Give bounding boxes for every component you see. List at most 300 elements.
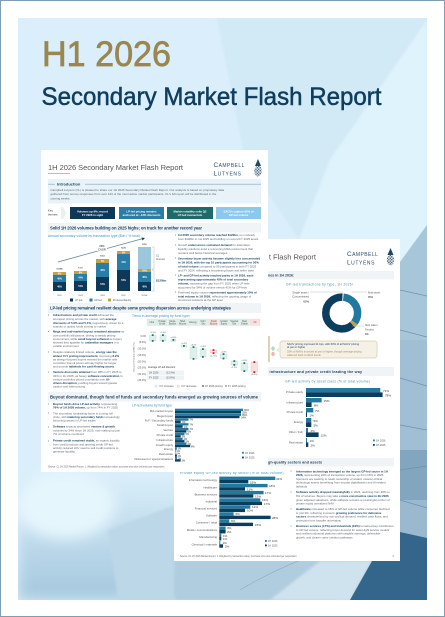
- stacked bar chart: annual secondary volume: [48, 234, 167, 302]
- bar chart: LP-led volume by fund type: Private credit: [157, 433, 173, 437]
- change labels: (1.7%): [211, 356, 217, 358]
- pricing commentary bullets: volatile environment: [53, 344, 79, 348]
- bar chart: LP-led volume by fund type: Mega buyout: [157, 414, 173, 418]
- bar chart: GP-led activity by sector: 28%: [272, 516, 278, 520]
- y axis: [132, 335, 147, 382]
- fund type header row: Equity: [221, 323, 228, 326]
- sector commentary bullets: tailwinds: [296, 484, 308, 488]
- bar values: 46%: [57, 286, 62, 288]
- fund type header row: M&A: [180, 320, 186, 323]
- bar chart: GP-led activity by asset class: Energy: [294, 420, 304, 424]
- donut chart: GP-led transactions by type: Single asset /: [292, 290, 309, 294]
- bar chart: LP-led volume by fund type: 0%: [176, 450, 181, 453]
- average discount table: FY 2025: [149, 377, 159, 380]
- bar chart: LP-led volume by fund type: 1%: [178, 455, 182, 458]
- buyout commentary bullets: Software impacts decreased venture & growth: [53, 425, 115, 429]
- bar values: $226: [121, 248, 127, 250]
- bar values: 45%: [57, 278, 62, 280]
- volume commentary bullets: total volume in 1H 2026, reflecting the growing usage of: [178, 294, 251, 298]
- bar chart: GP-led activity by sector: Industrial: [206, 500, 217, 504]
- year labels: 2026E: [141, 295, 148, 297]
- volume commentary bullets: from $108bn in 1H 2025 and building on record FY 2025 levels: [178, 237, 259, 241]
- bar values: 10%: [142, 270, 147, 272]
- pricing legend: [155, 385, 246, 388]
- bar chart: GP-led activity by sector: 16%: [250, 480, 256, 484]
- buyout commentary bullets: circle, with maturing secondary funds increasingly: [53, 415, 120, 419]
- average discount table: (13.3%): [166, 372, 175, 375]
- fund type header row: Real: [242, 321, 247, 323]
- bar chart: GP-led activity by sector: 17%: [265, 491, 271, 495]
- bar chart: GP-led activity by sector: Software: [206, 514, 217, 518]
- section header: high-quality sectors: [268, 458, 394, 466]
- page 2 source footnote: 2: [392, 556, 394, 558]
- bar chart: LP-led volume by fund type: 5%: [186, 440, 190, 444]
- bar chart: GP-led activity by sector: 1%: [223, 534, 228, 538]
- theme: SACVs: [216, 207, 261, 219]
- bar chart: GP-led activity by sector: Healthcare: [203, 485, 217, 489]
- bar chart: GP-led activity by asset class: 2%: [310, 429, 315, 433]
- bar chart: GP-led activity by sector: Private equity GP-led activity by sector (% of total volume): [180, 471, 284, 475]
- forecast bracket: CL: [156, 254, 160, 258]
- pricing legend: 1H 2026 pricing: [205, 385, 223, 388]
- key themes row: [48, 207, 261, 219]
- sector commentary bullets: to GP-led volume, reflecting buyer demand for asset-light service models: [296, 528, 390, 532]
- bar chart: LP-led volume by fund type: 1%: [178, 457, 182, 460]
- volume commentary bullets: remains well below historical averages: [178, 251, 228, 255]
- sector commentary bullets: private equity unrealized NAV: [296, 502, 334, 506]
- donut chart: GP-led transactions by type: 35%: [368, 296, 374, 299]
- pricing commentary bullets: conviction that oil prices will stay higher for longer: [53, 361, 117, 365]
- y axis: (10.0%): [138, 347, 146, 350]
- bar chart: GP-led activity by sector: [180, 471, 284, 548]
- bar chart: GP-led activity by asset class: Other / FoF: [289, 430, 303, 434]
- fund type header row: Estate: [241, 323, 248, 326]
- bar chart: LP-led volume by fund type: Mid-market buyout: [150, 409, 173, 413]
- buyout commentary bullets: from credit products and growing credit GP-led: [53, 442, 113, 446]
- change labels: +2.0%: [160, 332, 166, 334]
- change labels: +0.5%: [181, 343, 187, 345]
- bar chart: GP-led activity by sector: Financial services: [195, 507, 218, 511]
- change labels: +3.3%: [200, 346, 206, 348]
- fund type header row: Mega: [170, 321, 176, 323]
- bar chart: GP-led activity by asset class: Real estate: [289, 440, 303, 444]
- sector commentary bullets: given adjusted valuations, while software remains a meaningful portion of: [296, 498, 390, 502]
- bar chart: GP-led activity by asset class: 12%: [320, 434, 327, 438]
- theme: volumes: [70, 207, 115, 219]
- title: H1 2026: H1 2026: [42, 35, 171, 74]
- change labels: +0.8%: [170, 337, 177, 339]
- pricing legend: YoY increase: [159, 385, 174, 388]
- bar chart: LP-led volume by fund type: 36%: [244, 409, 250, 412]
- bar chart: LP-led volume by fund type: 8%: [191, 445, 195, 448]
- pricing legend: FY 2025 pricing: [228, 385, 246, 388]
- pricing commentary bullets: Mega and mid-market buyout remained attractive as: [53, 330, 125, 334]
- donut chart: GP-led transactions by type: Multi asset: [368, 292, 380, 294]
- change labels: [150, 332, 258, 376]
- bar chart: GP-led activity by asset class: 15%: [324, 399, 330, 403]
- y axis: (5.0%): [139, 341, 146, 344]
- floating bars: [150, 335, 248, 371]
- chart legend: [70, 298, 132, 302]
- section header: GP-led transactions: [268, 271, 394, 280]
- bar chart: GP-led activity by sector: 16%: [262, 498, 268, 502]
- pricing commentary bullets: strongest pricing across the market, with average: [53, 317, 117, 321]
- bar chart: GP-led activity by sector: 6%: [231, 519, 236, 523]
- volume commentary bullets: 1H 2026 secondary volume reached $120bn, up modestly: [178, 233, 256, 237]
- sector commentary bullets: Information technology emerged as the largest GP-led sector in 1H: [296, 469, 388, 473]
- bar chart: GP-led activity by sector: 10%: [247, 509, 253, 513]
- bar chart: GP-led activity by sector: 1%: [222, 541, 227, 545]
- floating bar chart: trend in average pricing by fund type: [132, 314, 260, 388]
- introduction panel: coming weeks.: [50, 196, 71, 200]
- theme: SACVs: SACVs capture 62% of: [224, 209, 254, 213]
- y axis: 0.0%: [141, 335, 147, 338]
- change labels: +1.9%: [150, 332, 156, 334]
- volume commentary bullets: structured solutions at the GP level: [178, 298, 223, 302]
- donut chart: GP-led transactions by type: 3%: [365, 333, 369, 336]
- callout: SACV and MAV pricing: 33% of MAVs in priced at par or higher, though average pricing: [287, 349, 362, 353]
- change labels: +8.2%: [191, 344, 197, 346]
- theme: market volatility: LP-led momentum: [178, 213, 203, 217]
- bar values: 41%: [78, 276, 83, 280]
- buyout commentary bullets: activity reduced LPs' need to sell credit positions to: [53, 446, 119, 450]
- volume commentary bullets: Preferred equity volume represented approximately 10% of: [178, 290, 257, 294]
- buyout commentary bullets: becoming assets in LP-led trades: [53, 419, 96, 423]
- bar chart: LP-led volume by fund type: 7%: [190, 428, 194, 431]
- bar chart: LP-led volume by fund type: 1H 2026: [245, 452, 255, 455]
- sector commentary bullets: sectors characterized by non-cyclical demand, resilient cash flows, and: [296, 515, 388, 519]
- theme: SACVs: GP-led volume: [229, 213, 249, 217]
- forecast bracket: forecast: [156, 258, 165, 261]
- pricing commentary bullets: discounts of 5.0% and 5.1%, respectively, driven by a: [53, 321, 124, 325]
- sector commentary bullets: Business services (17%) and industrials (16%) remained key contributors: [296, 524, 394, 528]
- section header: solid volumes: [48, 223, 261, 232]
- bar chart: LP-led volume by fund type: 1%: [178, 448, 182, 451]
- fund type header row: Energy: [189, 321, 197, 324]
- section header: buyout dominated: [48, 392, 261, 402]
- bar chart: LP-led volume by fund type: 35%: [242, 412, 248, 414]
- volume commentary bullets: of total volume compared to 55 participants in both FY 2025: [178, 264, 257, 268]
- chart legend: GP-led: [94, 299, 102, 302]
- average discount table: (13.9%): [166, 377, 175, 380]
- bar chart: GP-led activity by sector: 6%: [236, 512, 240, 516]
- bar values: 41%: [121, 261, 126, 264]
- page 2 logo: CAMPBELL: [347, 251, 378, 258]
- page 2 source footnote: [180, 555, 394, 558]
- fund type header row: Buyout: [169, 323, 176, 326]
- section header: GP-led transactions: nes in 1H 2026:: [268, 274, 294, 278]
- fund type header row: Special: [230, 321, 238, 323]
- bar chart: GP-led activity by sector: Consumer / retail: [196, 521, 217, 525]
- sector commentary bullets: technology assets benefitting from secular digitalization and AI-related: [296, 481, 386, 485]
- bar values: $108B: [56, 268, 63, 270]
- sector commentary bullets: Sponsors are seeking to retain ownership of scaled, mission-critical: [296, 477, 382, 481]
- bar chart: GP-led activity by asset class: 71%: [383, 389, 389, 393]
- bar values: 42%: [100, 269, 105, 272]
- bar chart: LP-led volume by fund type: 7%: [190, 418, 194, 422]
- pricing commentary bullets: 32% in 1H 2026, as heavy software concentration in: [53, 374, 123, 378]
- bar values: $162: [100, 256, 106, 258]
- bar chart: LP-led volume by fund type: 6%: [188, 431, 192, 434]
- report page 2 (behind): [174, 239, 400, 561]
- pricing commentary bullets: Venture discounts widened from 28% in FY 2025 to: [53, 370, 122, 374]
- fund type header row: Private: [159, 320, 166, 323]
- bar values: 45%: [142, 286, 147, 288]
- page 1 logo: [214, 159, 262, 178]
- page 1 logo: CAMPBELL: [214, 162, 245, 169]
- buyout commentary bullets: The secondary fundraising boom is coming full: [53, 411, 113, 415]
- bar chart: GP-led activity by sector: 2%: [225, 544, 230, 548]
- pricing commentary bullets: environment, while small buyout softened as buyers: [53, 337, 122, 341]
- year labels: 2025: [121, 295, 127, 297]
- theme: market volatility: Market volatility sofie Q2: [174, 209, 207, 213]
- fund type header row: Sec: [201, 324, 206, 326]
- page 1 source footnote: Source: CL 1H 2026 Market Report. 1. Weighted by transaction value; purchase price plus unfunded per respondent.: [48, 466, 165, 469]
- bar chart: GP-led activity by asset class: GP-led activity by asset class (% of total volume): [285, 380, 370, 384]
- bar chart: LP-led volume by fund type: 35%: [242, 414, 248, 417]
- page 2 logo: LUTYENS: [347, 260, 375, 266]
- fund type header row: VC: [253, 322, 257, 324]
- buyout commentary bullets: 76% of 1H 2026 volume, up from 74% in FY 2025: [53, 405, 118, 409]
- y axis: (35.0%): [138, 379, 146, 382]
- introduction panel: [48, 179, 261, 204]
- bar chart: LP-led volume by fund type: 0%: [176, 452, 181, 456]
- pricing commentary bullets: widest YoY pricing improvement, improving 8.2%: [52, 354, 119, 358]
- bar chart: GP-led activity by sector: 15%: [255, 523, 261, 527]
- page 1 logo: LUTYENS: [214, 170, 242, 178]
- chart legend: Preferred Equity: [113, 299, 132, 302]
- bar chart: GP-led activity by sector: 17%: [264, 502, 270, 506]
- volume commentary bullets: volume, narrowing the gap from FY 2025 when LP-leds: [178, 281, 250, 285]
- bar chart: GP-led activity by asset class: 7%: [315, 409, 320, 413]
- volume commentary bullets: Growth underscores sustained demand for alternative: [178, 243, 250, 247]
- y axis: (15.0%): [138, 354, 146, 357]
- donut chart: GP-led transactions by type: GP-led transactions by type, 1H 2026²: [286, 282, 354, 286]
- bar chart: GP-led activity by asset class: 1%: [310, 439, 314, 443]
- page 2 heading: t Flash Report: [269, 252, 317, 262]
- pricing legend: YoY decrease: [181, 385, 197, 388]
- change labels: +3.0%: [241, 360, 247, 362]
- bar chart: GP-led activity by sector: 18%: [269, 484, 275, 488]
- bar values: 54%: [121, 279, 126, 282]
- pricing commentary bullets: scarcity of quality funds coming to market: [53, 324, 106, 328]
- bar chart: GP-led activity by sector: 1H 2026: [268, 540, 278, 543]
- average discount table: [147, 366, 184, 380]
- fund type header row: Small: [211, 321, 217, 323]
- sector commentary bullets: and resilient industrial platforms with tangible earnings, defensible: [296, 532, 381, 536]
- bar chart: GP-led activity by sector: 2%: [227, 530, 232, 534]
- section header: solid volumes: Solid 1H 2026 volumes building on 2025 highs; on track for another record year: [50, 225, 202, 230]
- section header: infrastructure and private credit: [268, 367, 394, 376]
- bar chart: LP-led volume by fund type: 6%: [188, 443, 192, 446]
- forecast bracket: [152, 247, 167, 291]
- bar chart: GP-led activity by asset class: Infrastructure: [287, 400, 303, 404]
- section header: infrastructure and private credit: infrastructure and private credit leading the way: [270, 370, 363, 374]
- sector commentary bullets: protection from broader uncertainty: [296, 518, 342, 522]
- bar chart: LP-led volume by fund type: Small buyout: [157, 423, 173, 427]
- fund type header row: FoF /: [201, 321, 206, 323]
- volume commentary bullets: in 1H 2026, with the top 10 participants accounting for 50%: [178, 260, 259, 264]
- bar chart: GP-led activity by asset class: 8%: [314, 404, 319, 408]
- sector commentary bullets: 2026, representing 22% of transaction volume, up from 15% in 2025.: [296, 473, 384, 477]
- year labels: 2023: [78, 295, 84, 297]
- key themes row: Key: [48, 208, 54, 212]
- bar chart: GP-led activity by asset class: 1H 2025: [376, 444, 386, 447]
- bar values: 51%: [78, 286, 83, 288]
- bar chart: LP-led volume by fund type: Real estate: [159, 452, 173, 456]
- fund type header row: Sits: [232, 323, 237, 326]
- bar chart: GP-led activity by asset class: 1%: [310, 414, 314, 418]
- change labels: (4.4%): [251, 374, 258, 376]
- section header: LP-led pricing: LP-led pricing remained resilient despite some growing dispersion across underlying strategies: [50, 306, 232, 311]
- theme: LP-led pricing: anchored at ~13% discounts: [123, 213, 161, 217]
- bar chart: GP-led activity by sector: 32%: [276, 477, 282, 481]
- donut chart: GP-led transactions by type: Tenders: [365, 328, 375, 332]
- CAGR arrow: 26%: [99, 244, 105, 248]
- bar chart: GP-led activity by sector: Media / communications: [187, 528, 218, 532]
- theme: LP-led pricing: [119, 207, 164, 219]
- bar chart: GP-led activity by sector: 3%: [227, 526, 232, 530]
- bar chart: LP-led volume by fund type: Growth equity: [156, 443, 174, 447]
- fund type header row: Buyout: [210, 323, 218, 326]
- bar chart: GP-led activity by sector: 11%: [247, 488, 253, 492]
- bar chart: LP-led volume by fund type: LP-led volume by fund type: [132, 404, 172, 408]
- average discount table: 1H 2026: [149, 372, 159, 375]
- bar values: $111: [78, 268, 84, 270]
- buyout commentary bullets: volumes by 34% since 1H 2025, now making up just: [53, 428, 120, 432]
- donut chart: GP-led transactions by type: 62%: [303, 300, 310, 304]
- year labels: 2024: [100, 295, 106, 297]
- buyout commentary bullets: Private credit remained stable, as organic liquidity: [53, 439, 120, 443]
- bar chart: GP-led activity by asset class: 78%: [385, 394, 391, 398]
- bar chart: GP-led activity by asset class: [285, 380, 391, 448]
- change labels: +1.2%: [231, 367, 237, 369]
- bar values: 9%: [58, 274, 61, 276]
- pricing commentary bullets: Infrastructure and private credit achieved the: [53, 313, 114, 317]
- y axis: (20.0%): [138, 360, 146, 363]
- bar values: 8%: [79, 272, 82, 274]
- theme: volumes: Volumes up 9%; record: [77, 209, 108, 213]
- fund type header row: Infra: [149, 321, 155, 324]
- y axis: (30.0%): [138, 373, 146, 376]
- year labels: [57, 295, 148, 297]
- fund type header row: Buyout: [179, 323, 187, 326]
- callout: SACV and MAV pricing: [269, 336, 377, 362]
- bar values: [56, 244, 148, 288]
- bars: [53, 247, 151, 291]
- y axis: (25.0%): [138, 367, 146, 370]
- page 2 source footnote: Source: CL 1H 2026 Market Report. 1. Weighted by transaction value; purchase price plus unfunded per respondent.: [180, 555, 297, 558]
- sector commentary bullets: 6% of volumes. Buyers may take a more constructive view in 2H 2026: [296, 494, 389, 498]
- bar chart: GP-led activity by sector: Information technology: [189, 478, 218, 482]
- theme: market volatility: [167, 207, 213, 219]
- average discount table: Average LP-led discount: [148, 366, 175, 369]
- CAGR arrow: CAGR: [98, 248, 106, 252]
- bar chart: LP-led volume by fund type: 7%: [190, 423, 194, 426]
- bar chart: GP-led activity by sector: Business services: [195, 492, 218, 496]
- buyout commentary bullets: 7% of volume combined: [53, 432, 84, 436]
- pricing commentary bullets: driven disruption, pushing buyers toward greater: [53, 381, 117, 385]
- fund type header row: [147, 319, 260, 326]
- introduction panel: Campbell Lutyens (CL) is pleased to share our 1H 2026 Secondary Market Flash Report. Our analysis is based on proprietary data: [50, 188, 224, 192]
- CAGR arrow: [58, 238, 145, 262]
- introduction panel: gathered from survey responses from over 120 of the most active market participants. CL's full report will be distributed in the: [50, 192, 217, 196]
- sector commentary bullets: growth, and clearer value creation pathways: [296, 535, 353, 539]
- change labels: +2.8%: [221, 352, 227, 354]
- bar chart: GP-led activity by sector: Chemical / materials: [192, 542, 218, 546]
- bar chart: LP-led volume by fund type: FoF / Secondary funds: [145, 418, 174, 422]
- volume commentary bullets: representing approximately 45% of total secondary: [178, 277, 249, 281]
- bar chart: GP-led activity by sector: Manufacturing: [199, 535, 217, 539]
- buyout commentary bullets: [48, 402, 120, 454]
- bar chart: LP-led volume by fund type: 4%: [184, 438, 188, 441]
- sector commentary bullets: Software activity dropped meaningfully in 2026, declining from 28% to: [296, 490, 390, 494]
- pricing commentary bullets: Despite relatively limited volume, energy saw the: [53, 350, 117, 354]
- theme: LP-led pricing: LP-led pricing remains: [126, 209, 157, 213]
- bar values: 51%: [100, 284, 105, 286]
- y axis: Discount / Premium to NAV (%): [132, 342, 136, 371]
- pricing commentary bullets: venture portfolios priced uncertainty over AI-: [53, 377, 110, 381]
- bar values: $250: [142, 244, 148, 246]
- bar chart: GP-led activity by sector: 1%: [223, 537, 228, 541]
- bar chart: GP-led activity by sector: 1H 2025: [268, 544, 278, 548]
- bar chart: LP-led volume by fund type: 3%: [182, 460, 186, 463]
- volume commentary bullets: accounted for 54% of volume versus 41% for GP-leds: [178, 285, 247, 289]
- page 2 logo: [347, 248, 394, 266]
- bar chart: GP-led activity by asset class: 5%: [314, 419, 318, 423]
- bar chart: GP-led activity by asset class: 1H 2026: [376, 439, 386, 442]
- theme: volumes: FY 2026 in sight: [82, 213, 103, 217]
- report page 1 (front): [41, 150, 268, 472]
- bar chart: LP-led volume by fund type: [132, 404, 255, 463]
- bar chart: LP-led volume by fund type: 5%: [186, 433, 190, 436]
- bar chart: GP-led activity by sector: 12%: [252, 505, 258, 509]
- forecast bracket: $120bn: [156, 278, 167, 282]
- bar values: 45%: [142, 276, 147, 279]
- callout: SACV and MAV pricing: widened back to 2024 levels: [287, 353, 321, 357]
- bar chart: LP-led volume by fund type: 4%: [184, 426, 188, 429]
- sector commentary bullets: [290, 469, 394, 539]
- introduction panel: Introduction: [57, 182, 81, 187]
- bar chart: LP-led volume by fund type: Energy: [164, 447, 174, 451]
- donut chart: GP-led transactions by type: Strip sales /: [365, 324, 378, 327]
- section header: buyout dominated: Buyout dominated, though fund of funds and secondary funds emerged as growing sources of volume: [50, 394, 259, 400]
- pricing commentary bullets: showed less appetite for unfamiliar managers in a: [53, 341, 119, 345]
- sector commentary bullets: to just 4%, reflecting investors' growing preference for defensive: [296, 511, 382, 515]
- bar chart: GP-led activity by sector: 13%: [255, 495, 261, 499]
- bar chart: LP-led volume by fund type: 34%: [241, 416, 247, 420]
- volume commentary bullets: [175, 233, 260, 302]
- bar chart: LP-led volume by fund type: 3%: [182, 436, 186, 438]
- year labels: 2022: [57, 295, 63, 297]
- page 1 heading: 1H 2026 Secondary Market Flash Report: [48, 163, 184, 172]
- pricing markers: [152, 334, 245, 372]
- bar chart: LP-led volume by fund type: 3%: [182, 421, 186, 424]
- key themes row: themes: [48, 212, 58, 216]
- bar chart: LP-led volume by fund type: Distressed or special situations: [134, 457, 174, 461]
- title: Secondary Market Flash Report: Secondary Market Flash Report: [42, 83, 382, 111]
- bar values: 5%: [122, 252, 125, 254]
- bar chart: GP-led activity by asset class: Private credit: [287, 410, 303, 414]
- pricing commentary bullets: and provide tailwinds for cash-flowing assets: [53, 365, 115, 369]
- buyout commentary bullets: Buyout funds drive LP-led activity, representing: [53, 402, 118, 406]
- section header: LP-led pricing: [48, 303, 261, 313]
- volume commentary bullets: Secondary buyer activity became slightly less concentrated: [178, 256, 260, 260]
- bar chart: LP-led volume by fund type: Venture: [163, 428, 173, 432]
- fund type header row: Growth: [220, 320, 228, 323]
- floating bar chart: trend in average pricing by fund type: Trend in average pricing by fund type¹: [132, 314, 191, 318]
- pricing commentary bullets: as energy-focused buyers entered the market with: [53, 357, 118, 361]
